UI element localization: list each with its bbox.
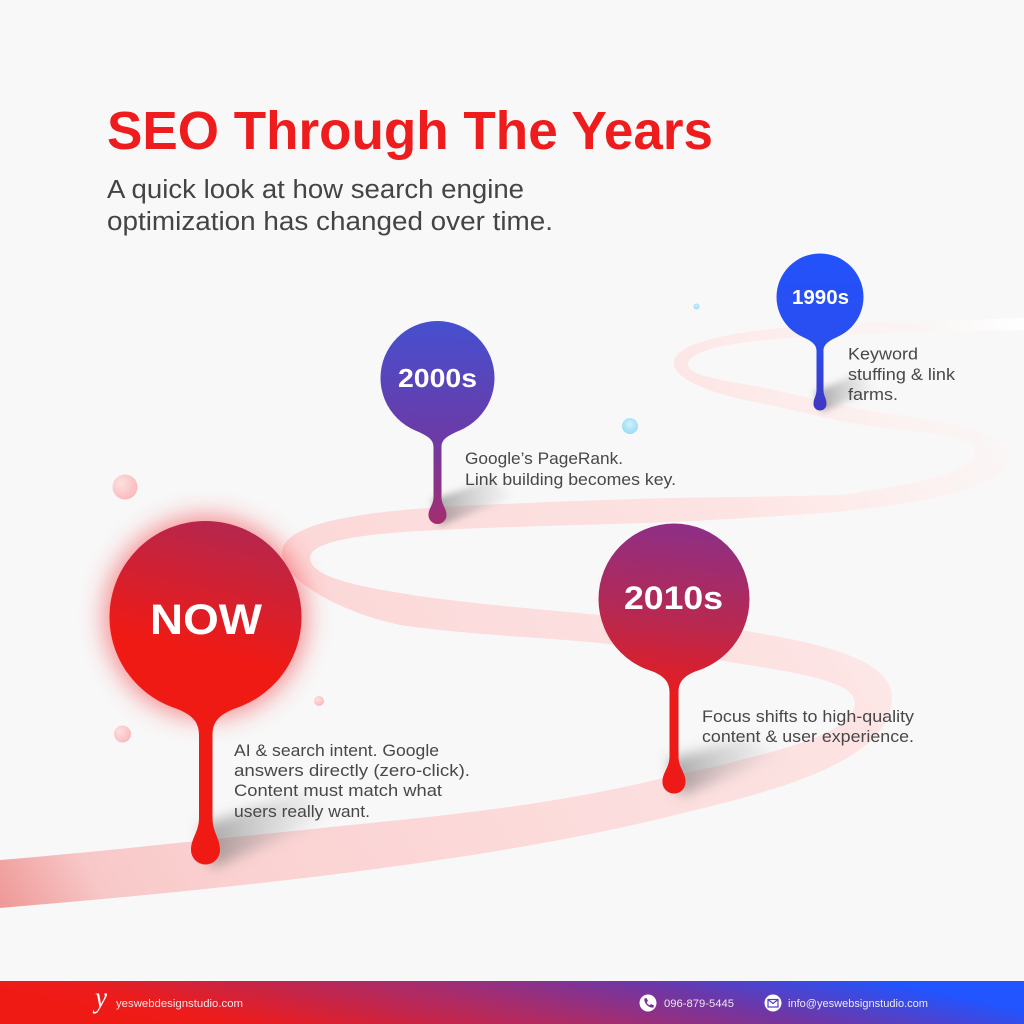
icon: mail <box>764 994 782 1012</box>
pin: 2000s: 2000s <box>398 363 477 393</box>
text: 2000s description: Google’s PageRank. <box>465 450 623 468</box>
text: 1990s description: Keyword <box>848 346 918 364</box>
title: SEO Through The Years <box>107 101 713 161</box>
subtitle: optimization has changed over time. <box>107 208 553 236</box>
text: now description: AI & search intent. Google <box>234 742 439 760</box>
text: now description <box>234 742 470 821</box>
text: now description: Content must match what <box>234 782 442 800</box>
email: info@yeswebsignstudio.com <box>788 998 928 1010</box>
floating bubbles <box>112 304 700 742</box>
text: 1990s description: stuffing & link <box>848 366 956 384</box>
pin: 2000s <box>380 321 516 526</box>
text: now description: answers directly (zero-click). <box>234 762 470 780</box>
footer bar <box>0 981 1024 1024</box>
text: 2010s description: content & user experience. <box>702 728 914 746</box>
winding road <box>0 318 1024 908</box>
website: yeswebdesignstudio.com <box>116 998 243 1010</box>
pin: 1990s <box>776 254 878 412</box>
subtitle <box>107 176 553 236</box>
icon: phone <box>640 994 656 1012</box>
pin: 2010s: 2010s <box>624 580 723 616</box>
pin: now: NOW <box>150 596 262 644</box>
text: 2000s description <box>465 450 676 489</box>
text: 1990s description: farms. <box>848 386 898 404</box>
pin: now <box>106 517 338 868</box>
text: 2010s description <box>702 708 915 746</box>
text: 1990s description <box>848 346 956 404</box>
phone number: 096-879-5445 <box>664 998 734 1010</box>
pin: 2010s <box>598 524 785 796</box>
text: 2000s description: Link building becomes key. <box>465 471 676 489</box>
subtitle: A quick look at how search engine <box>107 176 524 204</box>
text: now description: users really want. <box>234 803 370 821</box>
logo mark: y <box>92 981 108 1014</box>
text: 2010s description: Focus shifts to high-quality <box>702 708 915 726</box>
pin: 1990s: 1990s <box>792 287 849 309</box>
